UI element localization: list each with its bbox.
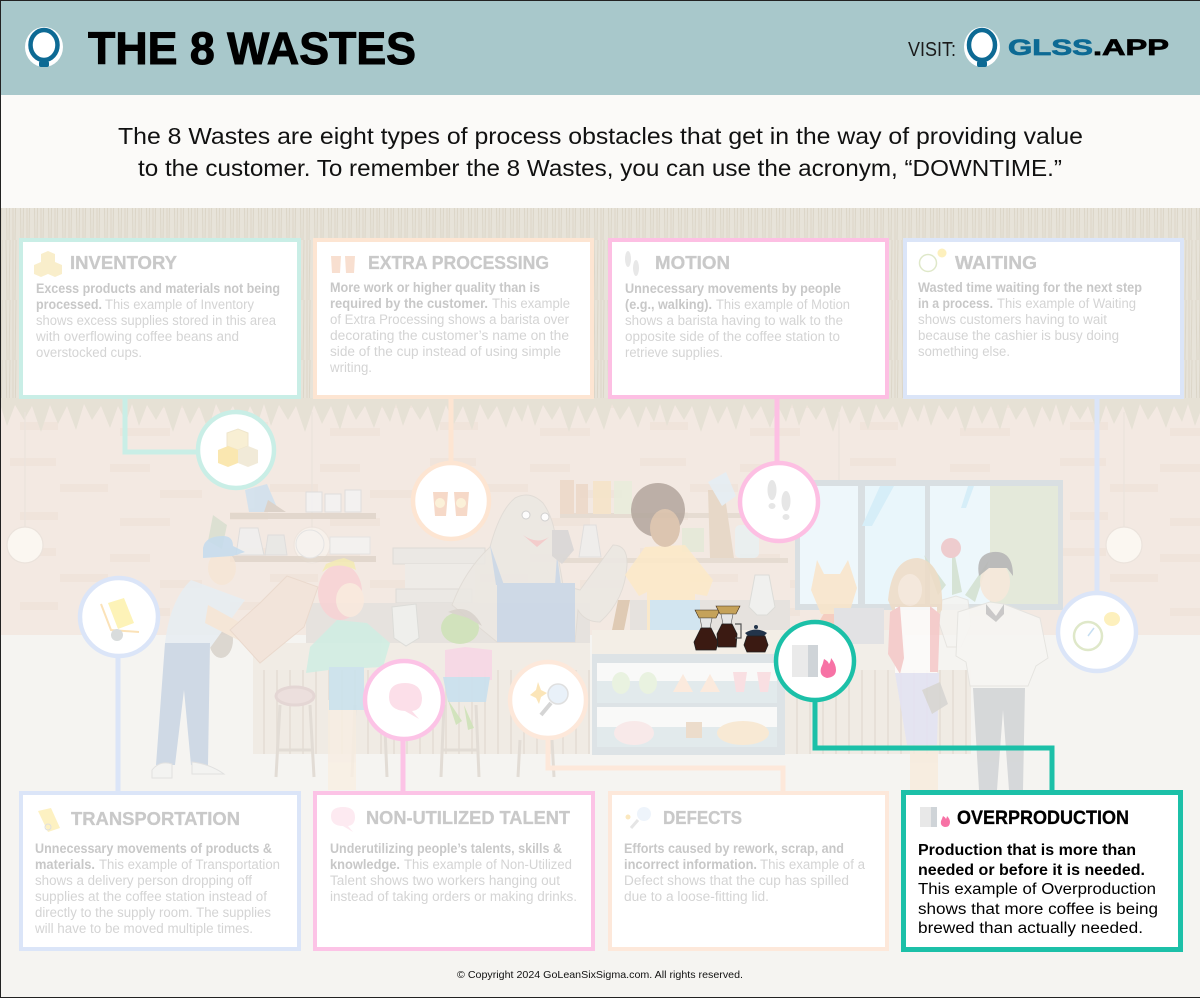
description: inventory: processed. [36,297,102,312]
description: defects: This example of a [760,857,865,872]
description: inventory: overstocked cups. [36,345,142,360]
connector: motion [774,399,780,462]
wall [0,395,1200,635]
icon: dolly [38,808,60,832]
description: defects: Defect shows that the cup has spilled [624,873,849,888]
copyright: © Copyright 2024 GoLeanSixSigma.com. All rights reserved. [457,969,743,981]
intro text: The 8 Wastes are eight types of process obstacles that get in the way of providing value [118,123,1083,149]
header band [0,0,1200,95]
panel: transportation [21,793,299,949]
panel: overproduction (highlighted) [904,792,1180,950]
description: transportation: shows a delivery person dropping off [35,873,252,888]
visit label: VISIT: [908,39,956,61]
window [795,480,1063,610]
icon: inventory boxes [34,251,62,277]
description: transportation [34,841,280,936]
GLSS.APP wordmark: GLSS [1008,35,1093,60]
icon: magnifier [626,807,651,828]
title: THE 8 WASTES [88,23,416,74]
description: extra processing [329,280,570,375]
description: transportation: supplies at the coffee station instead of [35,889,267,904]
connector: transportation [116,657,120,791]
plant in vase [924,538,989,647]
badge: defects magnifier [510,662,586,738]
coffee sack [230,576,318,663]
stools [276,687,554,777]
connector: extra processing [448,399,454,462]
front counter slats [253,670,590,754]
description: extra processing: writing. [329,360,372,375]
badge: inventory boxes [198,412,274,488]
connector: waiting [1094,399,1100,592]
back shelves with jars [560,472,790,563]
seal barista [452,495,627,642]
description: extra processing: decorating the customer’s name on the [330,328,569,343]
description: waiting: Wasted time waiting for the next step [918,280,1142,295]
description: defects [624,841,865,904]
badge: extra processing cups [413,463,489,539]
pitcher on back counter [749,575,775,615]
intro band [0,95,1200,208]
description: overproduction: shows that more coffee is being [918,901,1158,918]
description: overproduction: needed or before it is needed. [918,862,1145,879]
panel: inventory [21,240,299,397]
pastry counter top [592,630,784,654]
description: waiting: shows customers having to wait [918,312,1107,327]
panel: non-utilized talent [315,793,593,949]
badge: non-utilized talent brain [365,661,443,739]
description: inventory: with overflowing coffee beans and [35,329,239,344]
description: extra processing: side of the cup instead of using simple [330,344,561,359]
heading: waiting: WAITING [955,252,1037,273]
description: motion: Unnecessary movements by people [625,281,841,296]
description: transportation: directly to the supply room. The supplies [35,905,271,920]
description: inventory: Excess products and materials not being [36,281,280,296]
GLSS.APP wordmark: .APP [1093,35,1169,60]
description: non-utilized talent: knowledge. [330,857,400,872]
description: motion: (e.g., walking). [625,297,712,312]
description: waiting: in a process. [918,296,993,311]
description: inventory: shows excess supplies stored in this area [36,313,276,328]
description: extra processing: More work or higher quality than is [330,280,540,295]
description: transportation: will have to be moved multiple times. [34,921,253,936]
description: waiting: because the cashier is busy doing [918,328,1119,343]
heading: overproduction: OVERPRODUCTION [957,808,1129,829]
description: extra processing: This example [492,296,570,311]
description: inventory [35,281,280,360]
description: inventory: This example of Inventory [105,297,254,312]
thatched roof [0,208,1200,404]
description: non-utilized talent: This example of Non-Utilized [404,857,572,872]
description: motion: shows a barista having to walk to the [625,313,843,328]
panel: defects [610,793,887,949]
icon: footprints [625,251,639,276]
description: defects: due to a loose-fitting lid. [624,889,769,904]
description: overproduction: Production that is more than [918,842,1136,859]
description: motion: This example of Motion [716,297,850,312]
connector: overproduction [815,702,1052,791]
frog customer [441,609,492,730]
floor [0,635,1200,998]
description: defects: incorrect information. [624,857,757,872]
woman customer [888,558,948,791]
back counter dark band [306,603,590,667]
badge: overproduction stack and flame [776,622,854,700]
fox barista [808,560,870,640]
badge: transportation dolly [80,578,158,656]
description: extra processing: of Extra Processing shows a barista over [330,312,569,327]
description: non-utilized talent [330,841,577,904]
GLSS.APP wordmark [1008,35,1169,60]
description: overproduction: This example of Overproduction [918,881,1156,898]
upper shelf with supplies [230,484,376,519]
description: defects: Efforts caused by rework, scrap, and [624,841,844,856]
intro text: to the customer. To remember the 8 Wastes, you can use the acronym, “DOWNTIME.” [138,155,1062,181]
espresso machine [393,548,485,603]
panel: motion [610,240,887,397]
girl in teal cardigan [306,558,390,790]
description: transportation: This example of Transportation [99,857,280,872]
milk jug [392,604,419,646]
description: non-utilized talent: Talent shows two workers hanging out [330,873,560,888]
pot two [716,606,741,647]
heading: transportation: TRANSPORTATION [71,808,240,829]
description: waiting [918,280,1142,359]
pastry display case [592,654,785,755]
connector: non-utilized talent [400,741,406,791]
description: non-utilized talent: instead of taking orders or making drinks. [330,889,577,904]
description: motion: retrieve supplies. [625,345,723,360]
icon: cups [331,256,355,273]
heading: motion: MOTION [655,252,730,273]
barista with afro [612,483,713,630]
connector: defects [548,740,783,791]
badge: waiting clock [1058,593,1136,671]
logo: left lightbulb [25,27,63,67]
description: transportation: materials. [35,857,95,872]
description: overproduction [918,842,1158,937]
logo: right lightbulb [964,27,1000,67]
hanging lamps [7,412,1142,563]
coffee pots (highlighted) [694,606,768,652]
icon: stack and flame [920,807,950,827]
heading: inventory: INVENTORY [70,252,178,273]
heading: non-utilized talent: NON-UTILIZED TALENT [366,807,571,828]
heading: extra processing: EXTRA PROCESSING [368,252,549,273]
scene: coffee shop background [0,208,1200,998]
badge: motion footprints [740,463,818,541]
icon: clock [920,248,946,272]
description: non-utilized talent: Underutilizing people’s talents, skills & [330,841,562,856]
pot one [694,610,720,650]
heading: defects: DEFECTS [663,807,742,828]
description: waiting: This example of Waiting [997,296,1136,311]
description: motion: opposite side of the coffee station to [625,329,840,344]
description: motion [625,281,850,360]
connector: inventory [125,399,197,452]
roof fringe [0,398,1200,438]
intro text [118,123,1083,181]
description: transportation: Unnecessary movements of products & [35,841,272,856]
panel: waiting [905,240,1182,397]
man customer with glasses [956,552,1048,790]
pot three [744,625,768,652]
delivery person [152,536,248,778]
cash register [834,608,884,644]
description: overproduction: brewed than actually needed. [918,920,1143,937]
lower shelf with kettles [208,515,376,562]
icon: brain [331,807,355,832]
description: extra processing: required by the customer. [330,296,488,311]
panel: extra processing [315,240,592,397]
description: waiting: something else. [918,344,1010,359]
